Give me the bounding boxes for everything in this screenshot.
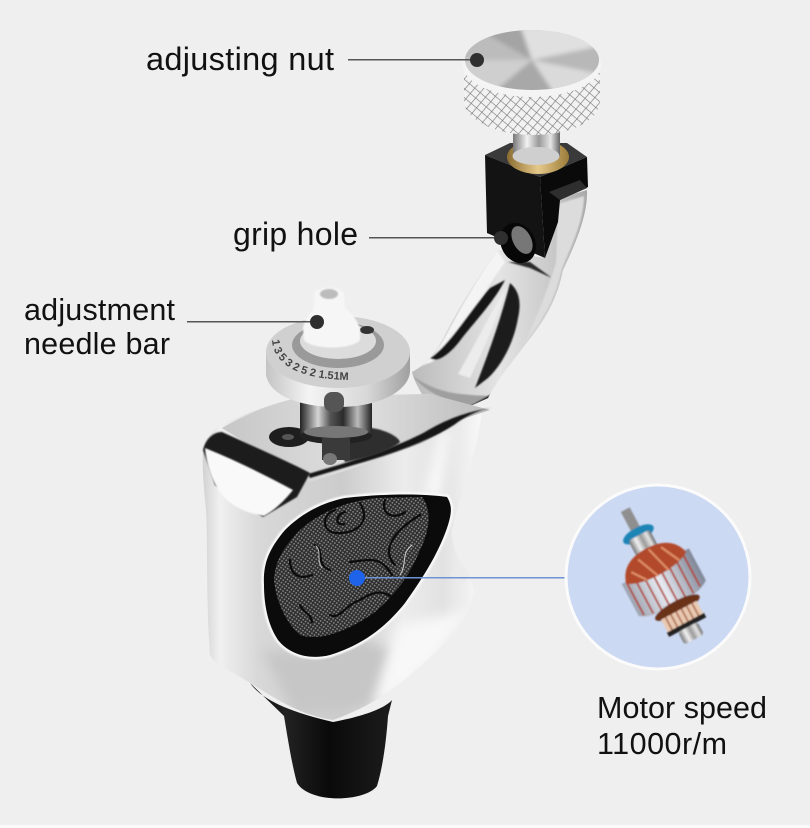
side pin <box>324 392 344 412</box>
machine arm <box>412 190 587 424</box>
label: grip hole: grip hole <box>233 216 358 252</box>
dark reflection on plate <box>335 428 400 462</box>
knurled side <box>464 62 600 135</box>
commutator <box>661 601 704 635</box>
blue marker dot <box>349 570 365 586</box>
lower copper coil <box>652 590 703 626</box>
core slots <box>626 552 702 621</box>
bearing <box>628 530 660 560</box>
brass ring and knob shaft <box>507 128 569 174</box>
clear plastic needle bar <box>303 288 360 348</box>
blue bearing washer <box>620 520 657 549</box>
white rim around window <box>264 494 451 657</box>
body facet shading <box>262 430 470 715</box>
motor speed callout connector <box>349 570 566 586</box>
grip hole opening <box>493 216 543 270</box>
shaft tip <box>621 507 643 537</box>
top plate dark rim <box>308 408 491 478</box>
adjusting nut knob <box>464 30 600 135</box>
machine body <box>203 394 491 720</box>
dial engraved numbers <box>272 340 348 380</box>
motor window mesh panel <box>264 494 451 657</box>
mesh texture <box>274 497 429 637</box>
label: adjusting nut <box>146 41 484 77</box>
shaft end <box>678 622 704 645</box>
motor detail circle <box>566 485 750 669</box>
left recess white highlight <box>205 448 293 516</box>
stem column <box>300 396 372 465</box>
dial disc side <box>266 352 410 407</box>
motor armature <box>592 492 728 657</box>
screw <box>269 427 309 447</box>
label: adjustment needle bar: needle bar <box>24 327 170 361</box>
label: grip hole <box>233 216 508 252</box>
knob top brushed disc <box>465 30 599 90</box>
needle dial and bar <box>266 288 410 412</box>
right side pin <box>451 567 469 583</box>
label: adjusting nut: adjusting nut <box>146 41 334 77</box>
dial disc top <box>266 316 410 388</box>
label: motor speed: 11000r/m <box>597 727 727 761</box>
upper copper coil <box>616 533 690 591</box>
nozzle: black grip tip <box>250 683 392 798</box>
label: adjustment needle bar <box>24 293 324 361</box>
black band <box>667 613 706 637</box>
inner collar <box>292 322 384 368</box>
black clamp block <box>485 143 588 270</box>
arm reflections <box>413 196 584 424</box>
laminated core <box>622 548 710 624</box>
label: adjustment needle bar: adjustment <box>24 293 176 327</box>
dial set hole <box>360 326 374 334</box>
label: motor speed <box>597 691 767 761</box>
knob bevel <box>463 33 601 97</box>
needle bar pin top <box>320 289 338 299</box>
embossed swirl pattern <box>290 500 420 622</box>
top plate <box>222 394 490 482</box>
left recess dark band <box>203 432 310 517</box>
label: motor speed: Motor speed <box>597 691 767 725</box>
